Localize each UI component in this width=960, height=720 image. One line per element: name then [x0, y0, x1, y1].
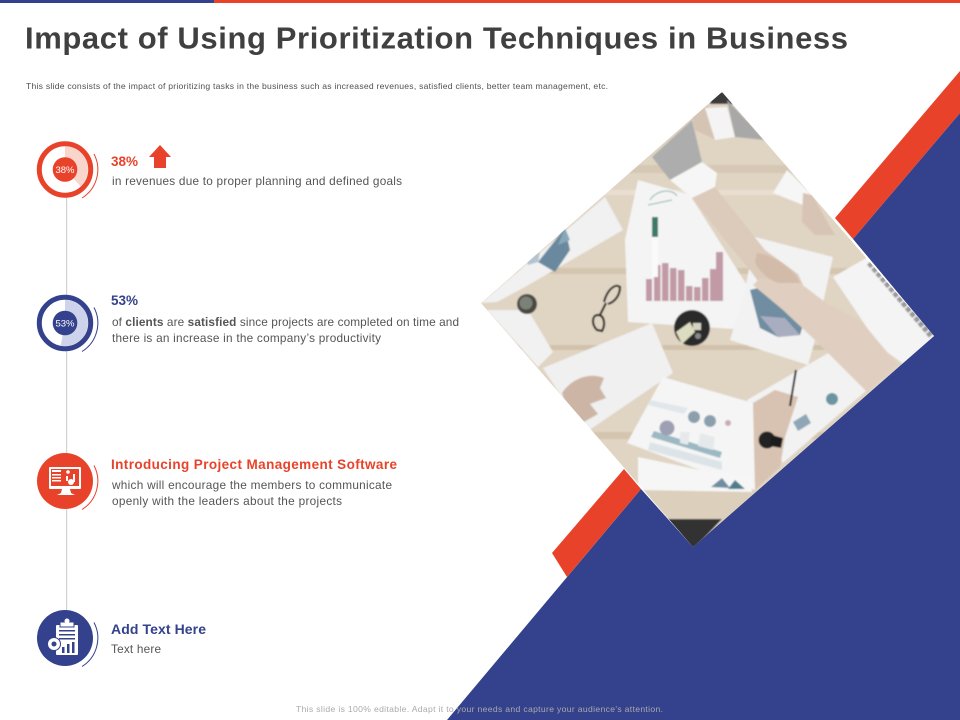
item 3: text: which will encourage the members to communicate	[111, 478, 392, 492]
top accent bar	[0, 0, 960, 3]
item 1: text: in revenues due to proper planning and defined goals	[112, 174, 402, 188]
upper right paper and hand	[773, 170, 812, 205]
lower left paper	[543, 323, 673, 433]
glasses	[593, 286, 620, 331]
timeline line	[66, 197, 67, 611]
subtitle: This slide consists of the impact of prioritizing tasks in the business such as increased revenues, satisfied clients, better team management, etc.	[26, 81, 608, 91]
blue fan chart left	[538, 228, 570, 272]
item 1: text: 38%	[111, 154, 138, 169]
report paper	[627, 377, 760, 490]
item 2: clients donut	[39, 297, 98, 352]
item 3: text: openly with the leaders about the projects	[112, 494, 342, 508]
dark corners	[710, 92, 735, 104]
item 1: revenue donut	[39, 144, 98, 198]
right paper	[730, 237, 833, 365]
item 1: text	[111, 154, 402, 188]
background shape: lower red stripe	[552, 469, 641, 577]
lower right paper	[747, 352, 867, 463]
arms	[694, 188, 803, 286]
item 3: text: Introducing Project Management Software	[111, 457, 397, 472]
item 4: text	[111, 621, 206, 656]
item 2: text: of clients are satisfied since projects are completed on time and	[112, 315, 459, 329]
sleeves and cuffs	[727, 100, 765, 140]
marker pen	[652, 217, 658, 237]
left papers	[481, 197, 623, 303]
fan chart right	[750, 288, 803, 338]
laptop	[833, 257, 940, 365]
centre paper	[625, 180, 750, 330]
item 2: text	[111, 293, 459, 345]
item 4: text: Text here	[111, 642, 161, 656]
bowl	[674, 310, 710, 346]
hand on lower left paper	[562, 376, 606, 423]
footer note: This slide is 100% editable. Adapt it to your needs and capture your audience's attention.	[296, 704, 663, 714]
item 2: clients donut: 53%	[55, 318, 75, 330]
item 3: text	[111, 457, 397, 508]
title: Impact of Using Prioritization Techniques in Business	[25, 20, 848, 56]
item 1: revenue donut: 38%	[55, 165, 75, 176]
item 4: clipboard icon	[37, 610, 98, 666]
diamond photo: business handshake over desk	[470, 85, 950, 555]
item 2: text: 53%	[111, 293, 138, 308]
item 2: text: there is an increase in the company’s productivity	[112, 331, 381, 345]
background shape: upper red stripe	[835, 71, 960, 239]
icon: up arrow	[149, 145, 171, 168]
item 4: text: Add Text Here	[111, 621, 206, 637]
hand with watch and pen	[753, 390, 798, 490]
item 3: software icon	[37, 453, 98, 510]
bar chart on desk paper	[646, 252, 723, 301]
background shape: blue	[447, 113, 960, 720]
